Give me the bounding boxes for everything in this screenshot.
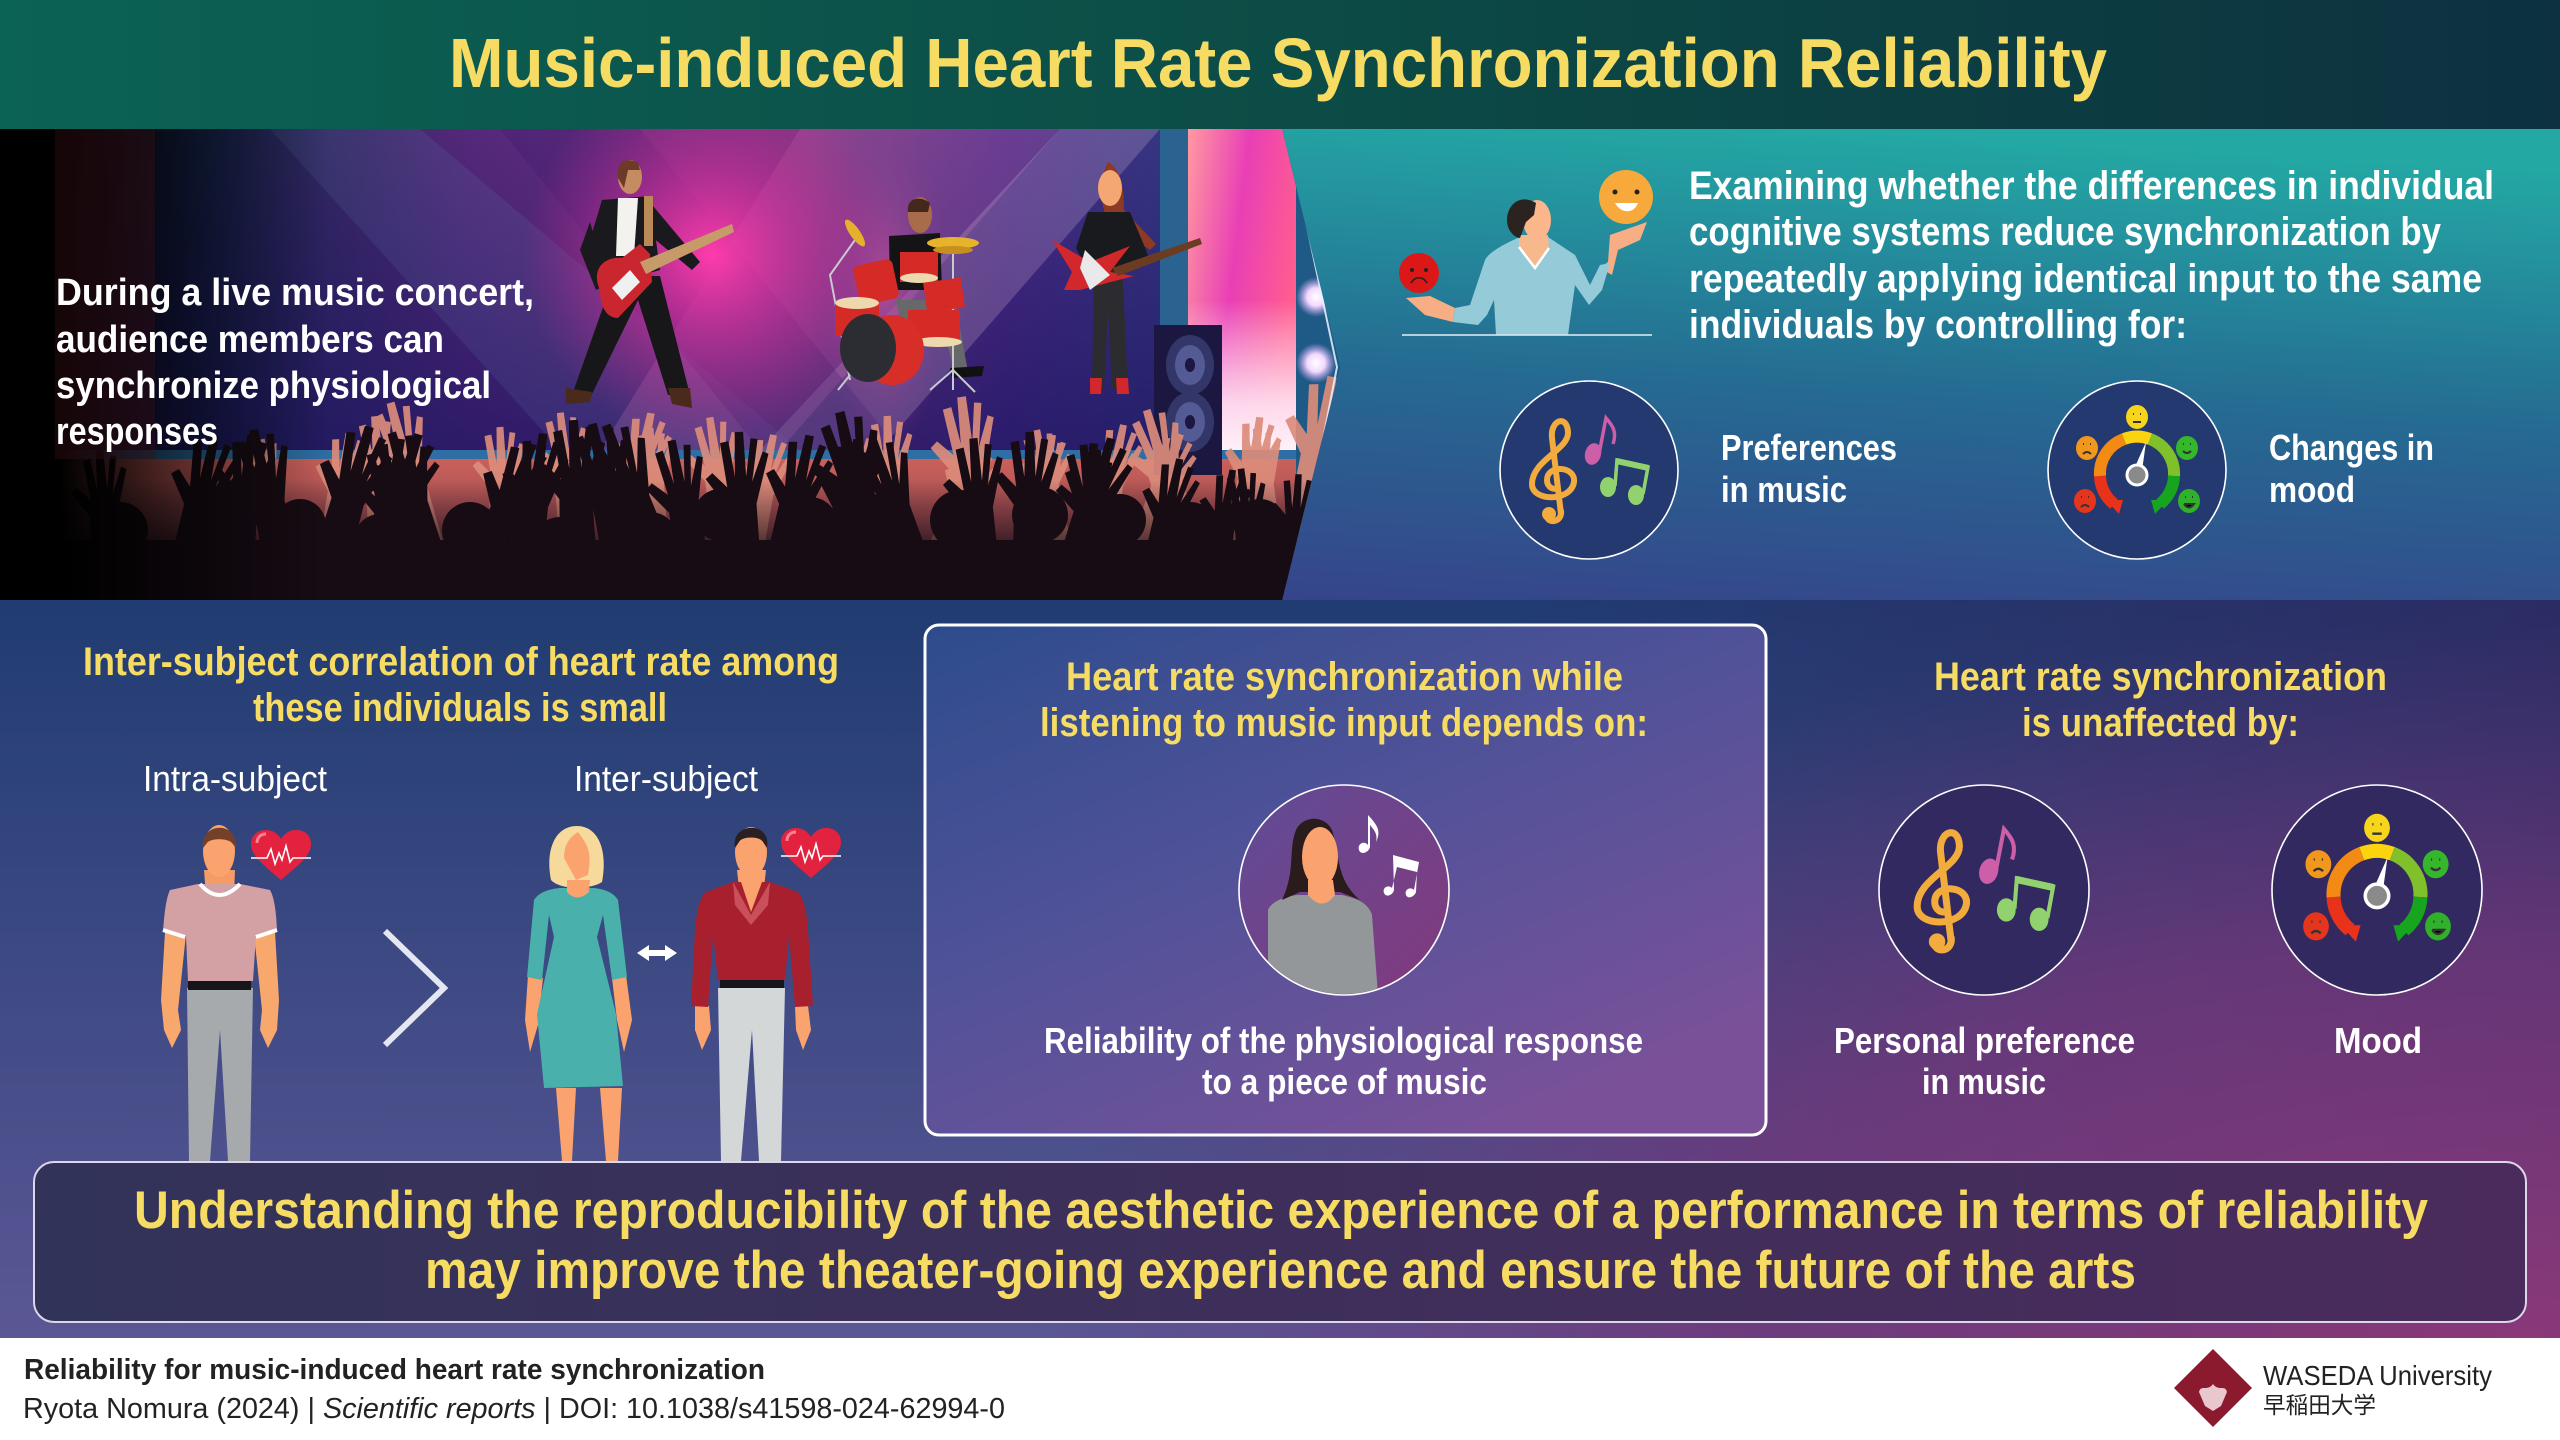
icon: heart rate 1	[251, 830, 311, 880]
label: inter-subject: Inter-subject	[574, 758, 758, 799]
icon: mood	[2272, 785, 2482, 995]
text: concert intro	[56, 272, 534, 453]
citation: Reliability for music-induced heart rate synchronization	[24, 1354, 765, 1386]
text: concert intro: audience members can	[56, 319, 444, 361]
text: concert intro: responses	[56, 411, 218, 453]
logo: Waseda University: WASEDA University	[2263, 1360, 2492, 1391]
text: examining: repeatedly applying identical input to the same	[1689, 257, 2482, 301]
drummer with drum kit	[830, 197, 984, 392]
citation: Ryota Nomura (2024) | Scientific reports | DOI: 10.1038/s41598-024-62994-0	[23, 1393, 1005, 1425]
figure: man inter-subject	[691, 827, 813, 1161]
guitarist woman	[1052, 162, 1202, 394]
citation	[23, 1354, 1005, 1425]
crowd: raised hands dark	[0, 404, 1345, 613]
footer	[0, 1338, 2560, 1440]
icon: music preferences	[1500, 381, 1678, 559]
label: reliability: to a piece of music	[1202, 1061, 1487, 1102]
label: personal preference: in music	[1922, 1061, 2046, 1102]
heading: inter-subject correlation: Inter-subject correlation of heart rate among	[83, 640, 839, 684]
label: preferences	[1721, 427, 1897, 510]
label: changes in mood: mood	[2269, 469, 2355, 510]
title banner	[0, 0, 2560, 129]
guitarist man	[566, 160, 734, 408]
text: concert intro: synchronize physiological	[56, 365, 491, 407]
main background top panel	[0, 129, 2560, 600]
heading: unaffected by: Heart rate synchronization	[1934, 655, 2387, 699]
arrow: double between subjects	[637, 945, 677, 961]
spotlight orbs	[1296, 277, 1336, 383]
text: examining: individuals by controlling for:	[1689, 303, 2187, 347]
text: examining: cognitive systems reduce synchronization by	[1689, 210, 2442, 254]
label: changes in mood: Changes in	[2269, 427, 2434, 468]
icon: woman listening	[1239, 785, 1449, 995]
icon: personal preference	[1879, 785, 2089, 995]
text: examining	[1689, 164, 2494, 347]
heading: depends on	[1040, 655, 1648, 745]
heading: depends on: Heart rate synchronization while	[1066, 655, 1623, 699]
heading: depends on: listening to music input depends on:	[1040, 701, 1648, 745]
label: changes in mood	[2269, 427, 2434, 510]
stage floor	[72, 450, 1296, 590]
panel: depends on	[925, 625, 1766, 1135]
label: reliability	[1044, 1020, 1643, 1102]
figure: woman inter-subject	[525, 826, 632, 1161]
icon: heart rate 2	[781, 828, 841, 878]
arrow: greater-than	[385, 931, 444, 1045]
crowd: raised hands light	[253, 376, 1337, 558]
callout: conclusion	[34, 1162, 2526, 1322]
text: concert intro: During a live music concert,	[56, 272, 534, 314]
label: reliability: Reliability of the physiological response	[1044, 1020, 1643, 1061]
logo: Waseda University	[2174, 1349, 2492, 1427]
heading: unaffected by	[1934, 655, 2387, 745]
label: personal preference	[1834, 1020, 2135, 1102]
heading: inter-subject correlation: these individuals is small	[253, 686, 667, 730]
label: preferences: in music	[1721, 469, 1847, 510]
icon: mood gauge	[2048, 381, 2226, 559]
label: personal preference: Personal preference	[1834, 1020, 2135, 1061]
label: mood: Mood	[2334, 1020, 2422, 1061]
icon: person weighing moods	[1399, 170, 1653, 336]
panel: concert scene	[0, 129, 1340, 600]
heading: unaffected by: is unaffected by:	[2022, 701, 2299, 745]
label: intra-subject: Intra-subject	[143, 758, 327, 799]
figure: man intra-subject	[161, 825, 279, 1161]
speaker stack	[1154, 325, 1222, 475]
label: preferences: Preferences	[1721, 427, 1897, 468]
main background bottom panel	[0, 600, 2560, 1338]
logo: Waseda University: 早稲田大学	[2263, 1392, 2376, 1418]
title: Music-induced Heart Rate Synchronization Reliability	[449, 24, 2107, 102]
callout: conclusion: may improve the theater-going experience and ensure the future of the arts	[425, 1241, 2136, 1300]
heading: inter-subject correlation	[83, 640, 839, 730]
